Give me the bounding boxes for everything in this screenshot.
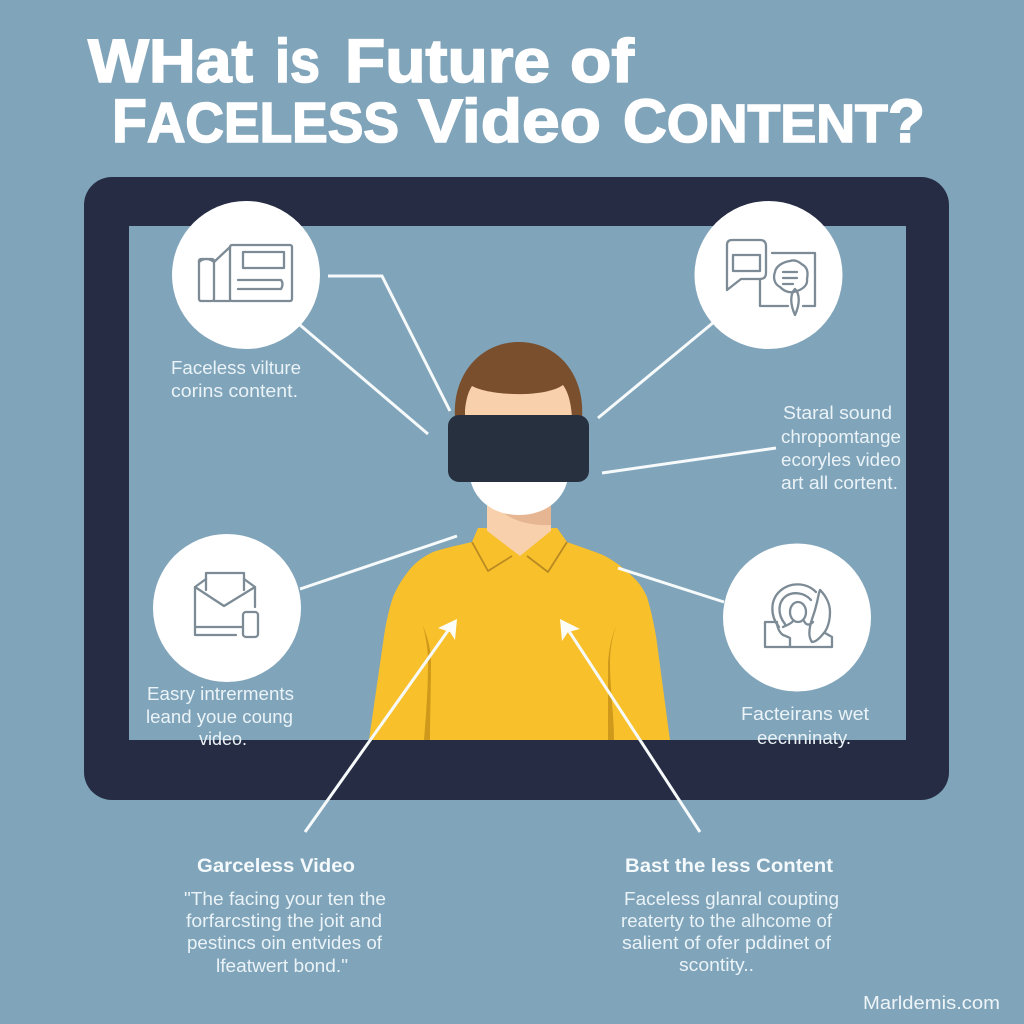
title: FACELESS	[112, 87, 399, 155]
text: ecoryles video	[781, 450, 901, 470]
text block: bottom left	[184, 856, 386, 976]
heading: Bast the less Content	[625, 856, 834, 877]
text	[171, 358, 301, 401]
blindfold	[448, 415, 589, 482]
body copy	[184, 889, 386, 976]
title: Future	[345, 27, 550, 95]
body copy: reaterty to the alhcome of	[621, 911, 833, 931]
icon: at sign and hand	[765, 584, 832, 647]
title: WHat	[88, 27, 253, 95]
person with blindfold	[369, 342, 670, 740]
panel: top left feature	[171, 201, 320, 401]
body copy: scontity..	[679, 955, 754, 975]
text: corins content.	[171, 381, 298, 401]
title: CONTENT?	[623, 87, 925, 155]
arrow: left upward	[305, 619, 457, 832]
text: Facteirans wet	[741, 704, 869, 724]
neck shadow	[497, 505, 551, 525]
title: Video	[418, 87, 601, 155]
panel: lower right feature	[723, 544, 871, 748]
text: video.	[199, 729, 247, 749]
text	[146, 684, 294, 749]
body copy: forfarcsting the joit and	[186, 911, 382, 931]
white chin	[470, 478, 568, 515]
body copy: Faceless glanral coupting	[624, 889, 839, 909]
collar	[472, 528, 567, 572]
heading: Garceless Video	[197, 856, 355, 877]
shirt	[369, 528, 670, 740]
text: Faceless vilture	[171, 358, 301, 378]
text: Staral sound	[783, 403, 892, 423]
text: eecnninaty.	[757, 728, 851, 748]
body copy	[621, 889, 839, 975]
arrow: right upward	[560, 619, 700, 832]
circle	[723, 544, 871, 692]
text: chropomtange	[781, 427, 901, 447]
neck	[487, 500, 551, 556]
title	[88, 27, 925, 155]
icon: envelope and phone	[195, 573, 258, 637]
footer credit: Marldemis.com	[863, 993, 1000, 1013]
body copy: lfeatwert bond."	[216, 956, 348, 976]
circle	[153, 534, 301, 682]
body copy: pestincs oin entvides of	[187, 933, 383, 953]
text	[741, 704, 869, 748]
circle	[694, 201, 842, 349]
body copy: "The facing your ten the	[184, 889, 386, 909]
body copy: salient of ofer pddinet of	[622, 933, 832, 953]
hair	[455, 342, 582, 418]
face	[465, 385, 572, 418]
circle	[172, 201, 320, 349]
text block: bottom right	[621, 856, 839, 975]
screen frame	[84, 177, 949, 800]
text: leand youe coung	[146, 707, 293, 727]
icon: newspaper	[199, 245, 292, 301]
panel: lower left feature	[146, 534, 301, 749]
sleeve fold lines	[423, 626, 616, 740]
connector lines	[300, 276, 776, 602]
text: art all cortent.	[781, 473, 898, 493]
text: Easry intrerments	[147, 684, 294, 704]
panel: top right feature	[694, 201, 901, 493]
title: of	[570, 27, 635, 95]
title: is	[275, 27, 320, 95]
icon: chat and document	[727, 240, 815, 315]
text	[781, 403, 901, 493]
